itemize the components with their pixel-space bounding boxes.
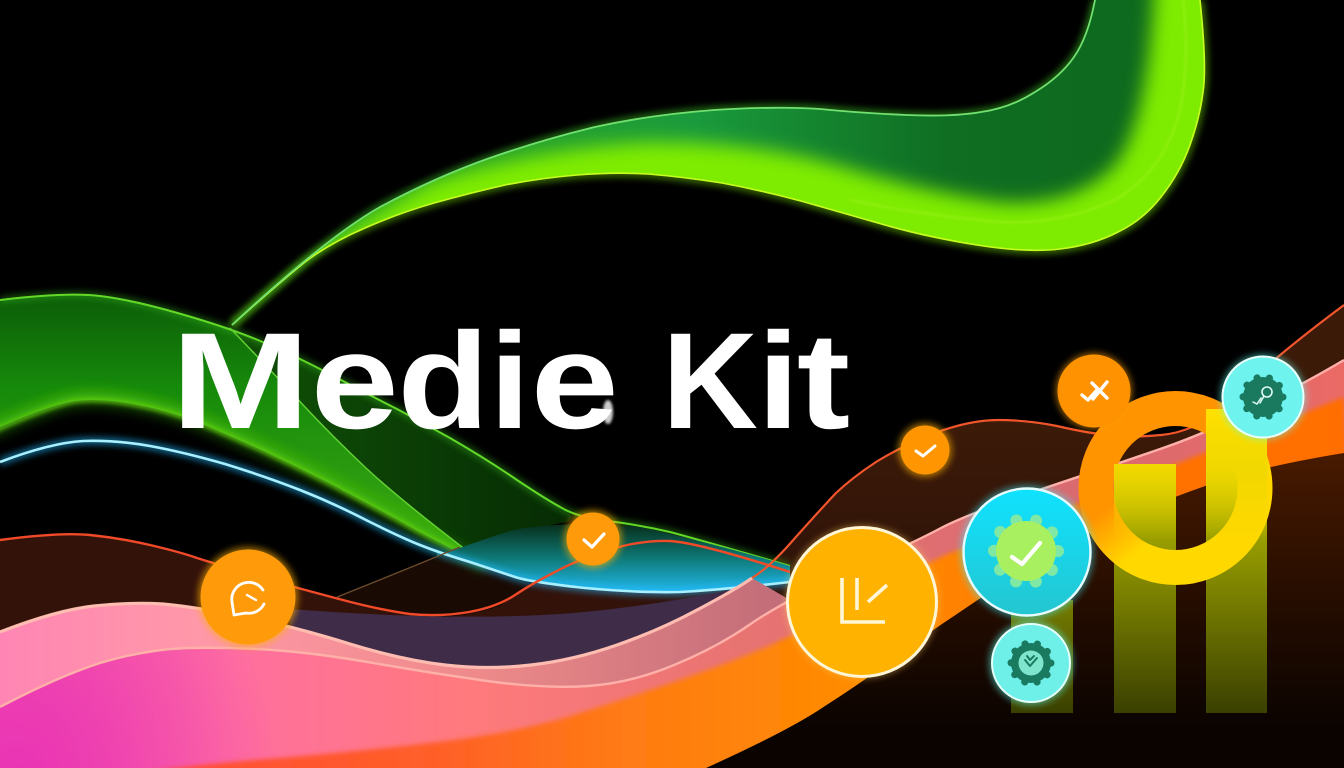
green ribbon: top <box>226 0 1213 330</box>
icon: cyan circle with gear check <box>960 485 1094 619</box>
brown wave area <box>0 305 1344 700</box>
green ribbon: left <box>0 295 790 566</box>
title: K <box>662 305 758 458</box>
dark lower right wave <box>690 453 1344 768</box>
title: M <box>171 305 310 458</box>
title: d <box>398 305 489 458</box>
bar chart with ring <box>1011 408 1267 713</box>
title: e <box>531 305 619 458</box>
icon: orange circle with check and cross <box>1056 353 1132 429</box>
pink wave <box>0 360 1344 768</box>
purple wave area <box>290 588 740 700</box>
title: t <box>797 305 850 458</box>
title: i <box>757 305 800 458</box>
orange wave band <box>130 397 1344 768</box>
title <box>171 305 850 458</box>
blue ribbon and glow line <box>0 441 790 592</box>
icon: teal circle with key badge <box>1220 354 1306 440</box>
title: i <box>489 305 530 458</box>
icon: orange check badge center <box>564 510 622 568</box>
red-orange wave line <box>0 305 1344 615</box>
title: e <box>311 305 399 458</box>
icon: small teal circle with badge <box>989 621 1073 705</box>
icon: orange chat bubble <box>198 547 298 647</box>
icon: orange check badge right <box>898 423 952 477</box>
icon: amber circle with chart <box>785 525 939 679</box>
